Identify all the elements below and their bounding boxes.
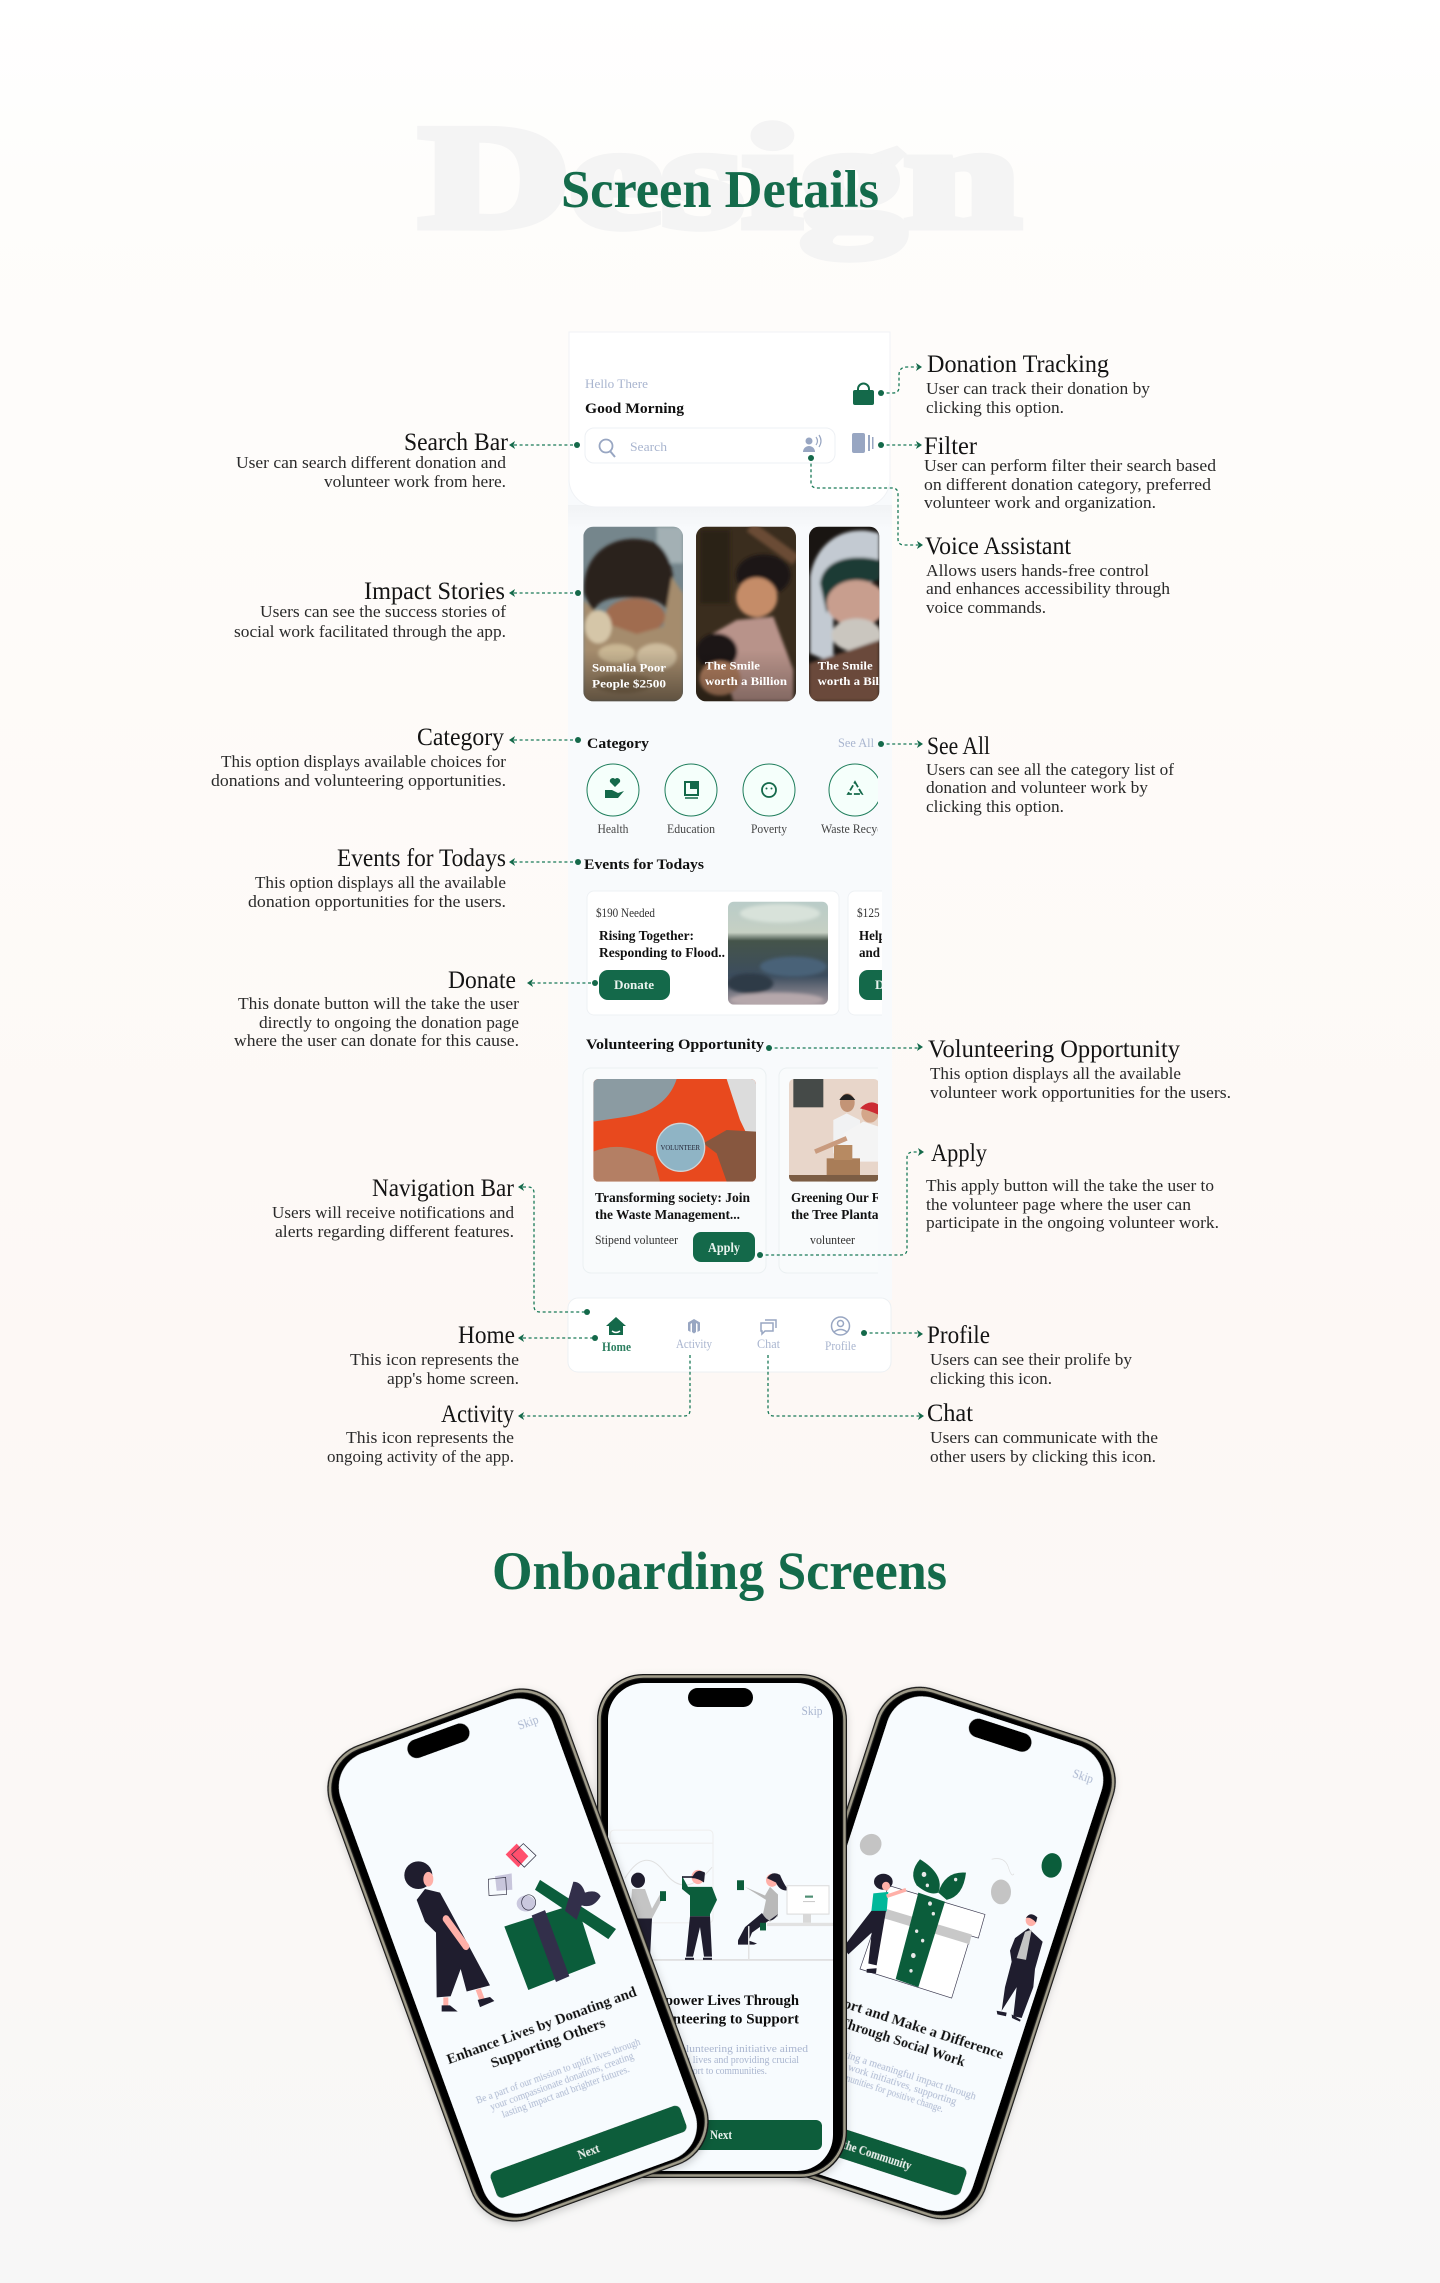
event card: flood: Responding to Flood.. <box>599 946 725 961</box>
annotation: Apply: the volunteer page where the user can <box>926 1195 1192 1214</box>
story card: smile elder: The Smile <box>818 658 873 672</box>
navigation bar <box>568 1298 891 1372</box>
phone: onboarding middle: Skip <box>802 1703 822 1718</box>
volunteer card: tree plantation: Greening Our Future: Join <box>791 1191 941 1206</box>
link: See All: See All <box>838 735 874 750</box>
nav item: Profile <box>825 1317 856 1353</box>
category: Poverty <box>743 764 795 836</box>
annotation: Apply: participate in the ongoing volunteer work. <box>926 1213 1219 1232</box>
annotation: Donate <box>234 967 598 1050</box>
category: Health <box>587 764 639 836</box>
phone: onboarding left: lasting impact and brighter futures. <box>501 2064 631 2121</box>
greeting: Good Morning <box>585 401 685 417</box>
phone: onboarding right: Join the Community <box>820 2130 914 2173</box>
icon: shopping bag <box>853 384 874 405</box>
event card: second <box>848 890 882 1016</box>
search bar: Search <box>630 439 668 454</box>
phone: onboarding right <box>734 1675 1128 2231</box>
phone: onboarding middle: at enriching lives and providing crucial <box>643 2055 799 2066</box>
illustration: gift box with people <box>843 1831 1064 2022</box>
greeting: Hello There <box>585 376 648 391</box>
annotation: Category: donations and volunteering opportunities. <box>211 771 506 790</box>
phone: onboarding right: Support and Make a Difference <box>810 1986 1006 2063</box>
annotation: Voice Assistant: and enhances accessibility through <box>926 579 1171 598</box>
phone: onboarding left <box>314 1675 722 2235</box>
annotation: Volunteering Opportunity: Volunteering Opportunity <box>928 1036 1180 1063</box>
title: Screen Details: Screen Details <box>561 161 879 219</box>
annotation: Impact Stories: Users can see the success stories of <box>260 602 506 621</box>
category: Education: Education <box>667 821 715 836</box>
phone: onboarding middle: Empower Lives Through <box>643 1993 800 2009</box>
volunteer card: tree plantation <box>778 1068 878 1274</box>
phone: onboarding right: Skip <box>1071 1765 1095 1786</box>
annotation: Search Bar: volunteer work from here. <box>324 472 506 491</box>
annotation: Navigation Bar: Users will receive notifications and <box>272 1203 514 1222</box>
nav item: Activity <box>676 1319 712 1351</box>
annotation: Activity <box>327 1355 690 1466</box>
photo: flood debris <box>727 902 828 1007</box>
annotation: Navigation Bar <box>272 1175 590 1315</box>
story card: smile elder: worth a Billion <box>818 674 900 688</box>
annotation: Impact Stories <box>234 578 581 641</box>
annotation: See All: Users can see all the category list of <box>926 760 1174 779</box>
story card: smile child: The Smile <box>705 658 761 672</box>
category row <box>587 764 901 836</box>
annotation: Search Bar: User can search different donation and <box>236 453 507 472</box>
section heading: Category: Category <box>587 736 650 752</box>
annotation: Donation Tracking: clicking this option. <box>926 398 1064 417</box>
annotation: Home: Home <box>458 1322 515 1349</box>
annotation: Activity: This icon represents the <box>346 1428 514 1447</box>
annotation: Chat <box>768 1355 1158 1466</box>
nav item: Activity: Activity <box>676 1336 712 1351</box>
annotation: Impact Stories: Impact Stories <box>364 578 505 605</box>
annotation: Home: app's home screen. <box>387 1369 519 1388</box>
nav item: Home: Home <box>602 1339 631 1354</box>
annotation: Category <box>211 724 581 790</box>
annotation: Category: Category <box>417 724 504 751</box>
annotation: See All: donation and volunteer work by <box>926 778 1148 797</box>
phone: onboarding left: Enhance Lives by Donating and <box>445 1984 640 2068</box>
annotation: Voice Assistant: Voice Assistant <box>925 533 1071 560</box>
section heading: Events for Todays: Events for Todays <box>584 857 704 873</box>
phone: onboarding middle <box>597 1674 847 2178</box>
story card: smile child: worth a Billion <box>705 674 787 688</box>
annotation: Voice Assistant: Allows users hands-free control <box>926 561 1149 580</box>
nav item: Profile: Profile <box>825 1338 856 1353</box>
annotation: Chat: Users can communicate with the <box>930 1428 1158 1447</box>
phone: onboarding left: your compassionate donations, creating <box>489 2051 636 2113</box>
annotation: See All: See All <box>927 733 990 760</box>
annotation: Events for Todays: donation opportunities for the users. <box>248 892 506 911</box>
category: Health: Health <box>598 821 629 836</box>
volunteer card: waste management: Transforming society: Join <box>595 1191 750 1206</box>
phone: onboarding right: Start making a meaningful impact through <box>808 2038 978 2103</box>
annotation: Filter: Filter <box>924 433 978 460</box>
illustration: team at chart and desk <box>608 1830 833 1960</box>
story card: Somalia: Somalia Poor <box>592 661 667 675</box>
annotation: Profile: clicking this icon. <box>930 1369 1052 1388</box>
story card: Somalia <box>583 527 683 701</box>
annotation: Donate: where the user can donate for this cause. <box>234 1031 519 1050</box>
event card: flood <box>587 891 839 1015</box>
annotation: Volunteering Opportunity: volunteer work opportunities for the users. <box>930 1083 1231 1102</box>
photo: volunteers with boxes <box>789 1079 879 1182</box>
event card: flood: Rising Together: <box>599 929 694 944</box>
annotation: Donate: Donate <box>448 967 516 994</box>
title: Onboarding Screens: Onboarding Screens <box>492 1541 947 1601</box>
annotation: Volunteering Opportunity <box>766 1036 1231 1102</box>
header card <box>569 332 890 507</box>
annotation: Profile: Profile <box>927 1322 990 1349</box>
volunteer card: tree plantation: volunteer <box>810 1232 856 1247</box>
story card: Somalia: People $2500 <box>592 676 666 690</box>
illustration: woman with gift box <box>404 1844 616 2012</box>
volunteer cards <box>582 1068 878 1274</box>
phone: onboarding left: Skip <box>515 1711 540 1733</box>
volunteer card: waste management: Stipend volunteer <box>595 1232 679 1247</box>
annotation: Chat: Chat <box>927 1400 973 1427</box>
nav item: Chat <box>757 1320 780 1351</box>
annotation: Filter: volunteer work and organization. <box>924 493 1156 512</box>
volunteer card: tree plantation: the Tree Plantation <box>791 1208 901 1223</box>
annotation: Chat: other users by clicking this icon. <box>930 1447 1156 1466</box>
icon: filter <box>852 433 874 453</box>
category: Waste Recycling <box>821 764 878 836</box>
photo: volunteer badge <box>593 1079 756 1182</box>
annotation: Activity: ongoing activity of the app. <box>327 1447 514 1466</box>
phone: onboarding left: Supporting Others <box>489 2015 608 2072</box>
annotation: Voice Assistant: voice commands. <box>926 598 1046 617</box>
annotation: Donation Tracking: User can track their donation by <box>926 379 1151 398</box>
volunteer card: waste management: the Waste Management... <box>595 1208 740 1223</box>
photo: volunteer badge: VOLUNTEER <box>661 1144 700 1152</box>
category: Waste Recycling: Waste Recycling <box>821 821 901 836</box>
nav item: Home <box>602 1317 631 1354</box>
annotation: Filter: on different donation category, preferred <box>924 475 1212 494</box>
story card: smile elder <box>809 526 880 702</box>
greeting <box>585 376 685 417</box>
ghost word: Design: Design <box>420 96 1020 258</box>
phone: onboarding right: communities for positive change. <box>827 2068 945 2115</box>
phone: onboarding left: Next <box>575 2140 602 2162</box>
search bar <box>585 428 835 463</box>
annotation: Home <box>350 1322 598 1388</box>
annotation: Voice Assistant <box>808 455 1171 617</box>
annotation: Events for Todays: This option displays all the available <box>255 873 506 892</box>
annotation: Donate: This donate button will the take the user <box>238 994 519 1013</box>
annotation: Search Bar <box>236 429 580 491</box>
event card: second: and <box>859 946 880 961</box>
phone screen: home <box>568 332 892 1372</box>
nav item: Chat: Chat <box>757 1336 780 1351</box>
annotation: See All <box>878 733 1174 816</box>
event card: second: Donate <box>875 977 915 992</box>
annotation: Volunteering Opportunity: This option displays all the available <box>930 1064 1181 1083</box>
annotation: Donate: directly to ongoing the donation page <box>259 1013 519 1032</box>
event card: second: Helping <box>859 929 903 944</box>
category: Education <box>665 764 717 836</box>
annotation: Donation Tracking: Donation Tracking <box>927 351 1109 378</box>
annotation: Apply: Apply <box>931 1140 987 1167</box>
annotation: Donation Tracking <box>878 351 1151 417</box>
phone: onboarding left: Be a part of our mission to uplift lives through <box>475 2037 643 2107</box>
phone: onboarding middle: Next <box>710 2127 733 2142</box>
annotation: Home: This icon represents the <box>350 1350 519 1369</box>
button: Apply <box>693 1232 755 1262</box>
annotation: Apply <box>757 1140 1219 1258</box>
button: Donate: Donate <box>614 977 654 992</box>
category: Poverty: Poverty <box>751 821 787 836</box>
annotation: Category: This option displays available choices for <box>221 752 506 771</box>
annotation: Apply: This apply button will the take the user to <box>926 1176 1214 1195</box>
annotation: Navigation Bar: alerts regarding different features. <box>275 1222 514 1241</box>
annotation: Filter: User can perform filter their search based <box>924 456 1217 475</box>
phone: onboarding right: social work initiatives, supporting <box>821 2054 958 2108</box>
phone: onboarding middle: support to communities. <box>675 2066 767 2077</box>
annotation: See All: clicking this option. <box>926 797 1064 816</box>
event cards <box>586 890 882 1016</box>
button: Donate <box>599 970 670 1000</box>
phone: onboarding right: Through Social Work <box>837 2014 968 2071</box>
annotation: Activity: Activity <box>441 1401 514 1428</box>
annotation: Events for Todays: Events for Todays <box>337 845 506 872</box>
annotation: Navigation Bar: Navigation Bar <box>372 1175 515 1202</box>
phone: onboarding middle: Join our volunteering initiative aimed <box>634 2044 809 2055</box>
button: Apply: Apply <box>708 1241 740 1256</box>
annotation: Search Bar: Search Bar <box>404 429 509 456</box>
impact story cards <box>583 527 900 701</box>
event card: second: $125 Needed <box>857 906 918 920</box>
annotation: Profile: Users can see their prolife by <box>930 1350 1133 1369</box>
volunteer card: waste management <box>583 1068 766 1273</box>
event card: flood: $190 Needed <box>596 906 656 920</box>
annotation: Impact Stories: social work facilitated through the app. <box>234 622 506 641</box>
phone: onboarding middle: Volunteering to Support <box>643 2012 799 2028</box>
annotation: Profile <box>861 1322 1133 1388</box>
annotation: Filter <box>878 433 1217 512</box>
section heading: Volunteering Opportunity: Volunteering Opportunity <box>586 1037 765 1053</box>
story card: smile child <box>696 527 796 701</box>
annotation: Events for Todays <box>248 845 581 911</box>
